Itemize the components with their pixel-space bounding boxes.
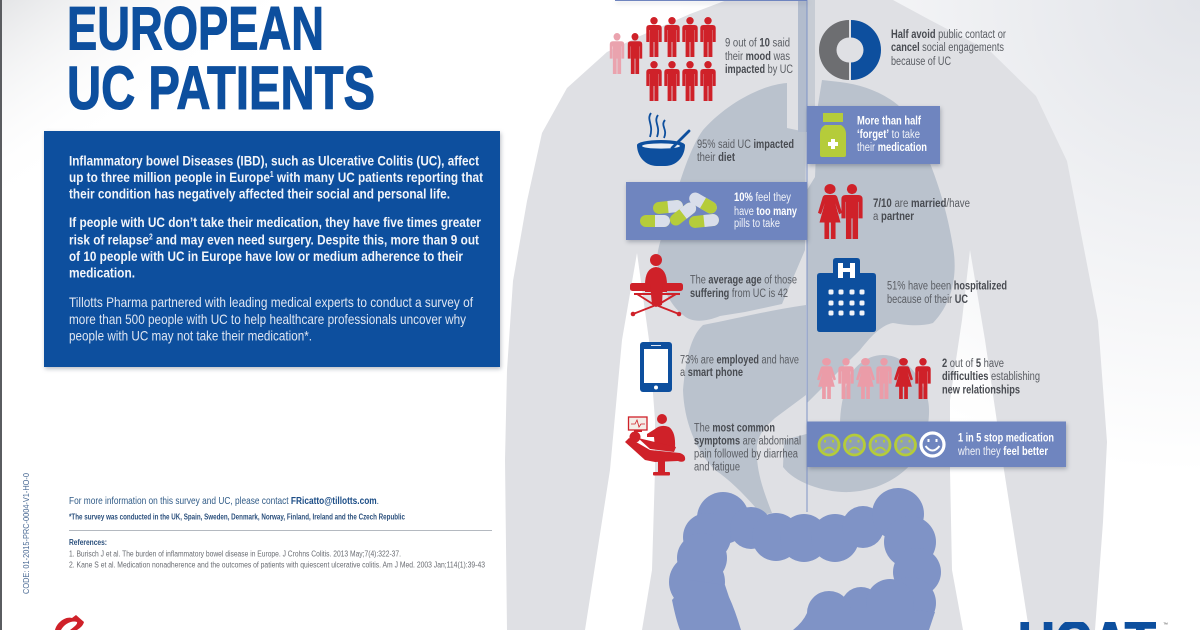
panel: introduction	[44, 131, 500, 367]
text: age: The average age of those	[690, 275, 797, 287]
text: hospitalized: because of their UC	[887, 294, 968, 306]
text: employed: a smart phone	[680, 367, 743, 379]
panel: too many pills	[626, 182, 807, 240]
text: social: Half avoid public contact or	[891, 29, 1006, 41]
text: mood: impacted by UC	[725, 64, 793, 76]
footer: references	[69, 538, 485, 569]
paragraph: adherence: medication.	[69, 265, 135, 281]
text: married: 7/10 are married/have	[873, 198, 970, 210]
icon: sad faces	[819, 435, 916, 455]
text: mood	[725, 38, 793, 76]
text: relationships: difficulties establishing	[942, 371, 1040, 383]
icon: bowl	[637, 113, 689, 166]
organ: left lung	[657, 83, 806, 321]
internal organs	[657, 80, 955, 515]
footer: contact: *The survey was conducted in the UK, Spain, Sweden, Denmark, Norway, Finland, Ireland and the Czech Republic	[69, 512, 405, 522]
text: symptoms: symptoms are abdominal	[694, 435, 801, 447]
text: relationships: 2 out of 5 have	[942, 358, 1004, 370]
text: social	[891, 29, 1006, 68]
text: mood: 9 out of 10 said	[725, 38, 790, 50]
text: mood: their mood was	[725, 51, 790, 63]
paragraph: adherence: and may even need surgery. Despite this, more than 9 out	[153, 231, 479, 247]
paragraph: IBD: their condition has negatively affected their social and personal life.	[69, 186, 450, 202]
text: forget	[857, 116, 927, 154]
icon: doctor with patient	[625, 414, 685, 476]
esophagus	[798, 0, 815, 132]
icon: 9 of 10 people	[610, 17, 716, 101]
paragraph: IBD: Inflammatory bowel Diseases (IBD), such as Ulcerative Colitis (UC), affect	[69, 152, 479, 168]
text: symptoms: and fatigue	[694, 462, 740, 474]
text: pills: have too many	[734, 206, 797, 218]
text: relationships	[942, 358, 1040, 397]
organ: right lung	[807, 80, 955, 403]
paragraph: IBD: with many UC patients reporting that	[274, 169, 483, 185]
paragraph: adherence: If people with UC don’t take their medication, they have five times greater	[69, 214, 481, 230]
footer: contact	[69, 495, 405, 522]
paragraph: IBD	[69, 152, 483, 202]
text: age	[690, 275, 797, 300]
text: social: cancel social engagements	[891, 42, 1004, 54]
text: forget: their medication	[857, 142, 927, 154]
text: diet	[697, 139, 794, 164]
icon: person on table	[630, 254, 683, 316]
icon: couple	[818, 184, 863, 239]
centre line	[806, 0, 808, 512]
panel: stop medication	[807, 422, 1066, 467]
text: employed: 73% are employed and have	[680, 354, 799, 366]
paragraph: survey: more than 500 people with UC to help healthcare professionals uncover why	[69, 311, 466, 327]
text: hospitalized	[887, 281, 1007, 306]
text: pills: pills to take	[734, 218, 780, 230]
logo: Tillotts swoosh	[55, 615, 84, 630]
icon: happy face	[921, 433, 944, 456]
text: symptoms: pain followed by diarrhea	[694, 448, 798, 460]
footer: references: References:	[69, 538, 107, 547]
text: married	[873, 198, 970, 223]
paragraph: adherence	[69, 214, 481, 281]
icon: hospital	[817, 258, 876, 332]
logo: UCAT: ™	[1163, 622, 1168, 628]
title: UC PATIENTS	[67, 54, 375, 122]
footer: references: 2. Kane S et al. Medication nonadherence and the outcomes of patients with quiescent ulcerative colitis. Am J Med. 2003 Jan;114(1):39-43	[69, 560, 485, 569]
text: stop: when they feel better	[957, 446, 1048, 458]
top blue box edge	[615, 0, 807, 1]
colon	[669, 488, 941, 630]
text: married: a partner	[873, 211, 914, 223]
icon: half donut	[819, 20, 881, 80]
paragraph: adherence: of 10 people with UC in Europe have low or medium adherence to their	[69, 248, 463, 264]
icon: relationship people	[817, 358, 931, 399]
icon: pills	[640, 190, 720, 229]
text: stop: 1 in 5 stop medication	[958, 433, 1054, 445]
text: diet: 95% said UC impacted	[697, 139, 794, 151]
paragraph: IBD: up to three million people in Europe	[69, 169, 308, 185]
text: relationships: new relationships	[942, 385, 1020, 397]
vertical code: CODE: 01-2015-PRC-0004-V1-HO-0	[22, 473, 31, 594]
text: stop	[957, 433, 1054, 458]
text: forget: More than half	[857, 116, 921, 128]
paragraph: adherence: risk of relapse	[69, 231, 164, 247]
text: forget: ‘forget’ to take	[857, 129, 920, 141]
paragraph: survey: Tillotts Pharma partnered with leading medical experts to conduct a survey of	[69, 294, 473, 310]
text: diet: their diet	[697, 152, 735, 164]
paragraph: survey: people with UC may not take their medication*.	[69, 328, 312, 344]
paragraph: survey	[69, 294, 473, 344]
text: employed	[680, 354, 799, 379]
text: pills: 10% feel they	[734, 192, 791, 204]
icon: phone	[640, 342, 672, 392]
panel: forget medication	[807, 106, 940, 164]
text: social: because of UC	[891, 56, 951, 68]
footer: references: 1. Burisch J et al. The burden of inflammatory bowel disease in Europe. J Crohns Colitis. 2013 May;7(4):322-37.	[69, 549, 401, 558]
text: symptoms	[694, 423, 801, 474]
icon: pill bottle	[820, 113, 846, 157]
paragraph: adherence: 2	[149, 232, 153, 241]
text: age: suffering from UC is 42	[690, 288, 788, 300]
title	[67, 0, 375, 122]
organ: small intestine	[683, 305, 806, 515]
text: pills	[734, 192, 797, 230]
organ: stomach	[783, 355, 929, 492]
text: symptoms: The most common	[694, 423, 775, 435]
text: hospitalized: 51% have been hospitalized	[887, 281, 1007, 293]
paragraph: IBD: 1	[270, 170, 274, 179]
footer: contact: For more information on this survey and UC, please contact FRicatto@tillotts.com.	[69, 495, 379, 507]
body silhouette	[505, 0, 1107, 630]
